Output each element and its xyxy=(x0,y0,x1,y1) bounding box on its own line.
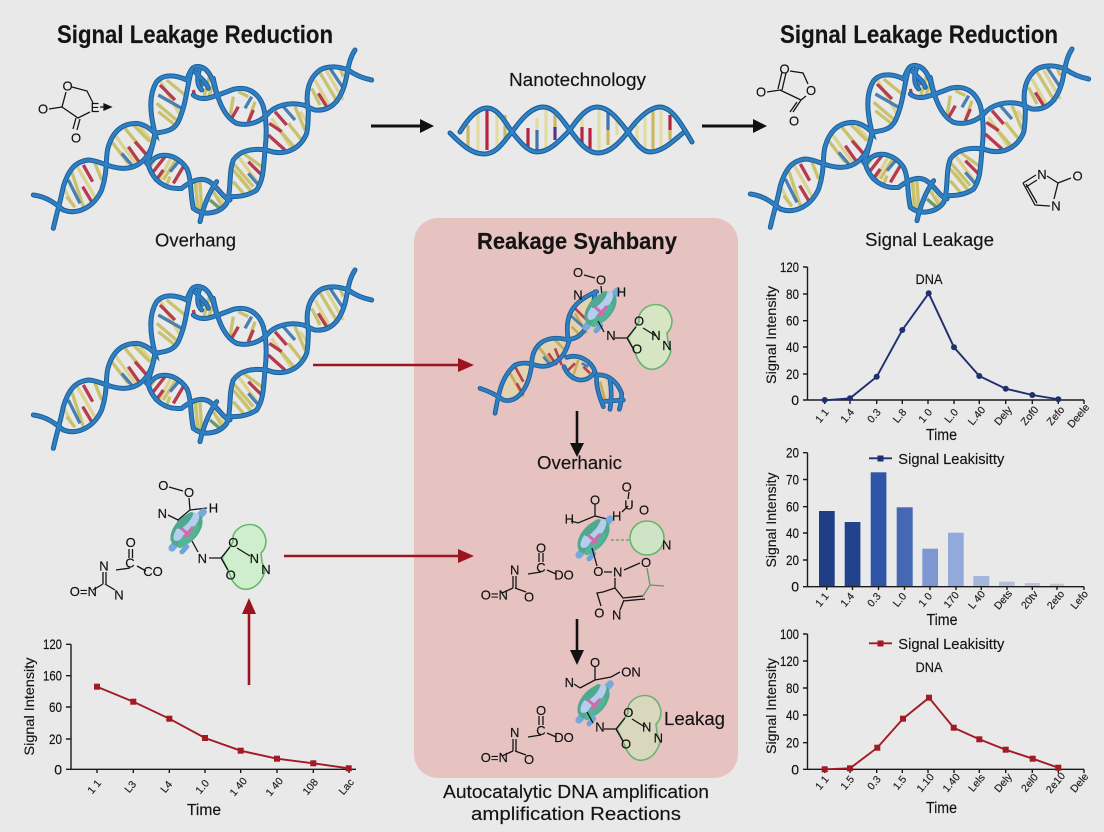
molecule: small left xyxy=(70,535,163,602)
y-axis ticks: 0 xyxy=(791,392,799,408)
caption: autocatalytic amplification: amplification Reactions xyxy=(471,804,681,824)
label: Signal Leakage: Signal Leakage xyxy=(865,230,994,250)
x-axis ticks: 1 40 xyxy=(228,775,250,799)
y-axis label: Signal Intensity xyxy=(763,658,779,754)
x-axis ticks: 1 1 xyxy=(85,778,104,797)
panel molecule 1: N xyxy=(662,338,672,353)
x-axis ticks xyxy=(813,770,1091,796)
panel DNA fragment xyxy=(480,292,623,413)
panel molecule 2: N xyxy=(612,608,621,622)
arrow: red to panel upper xyxy=(313,358,474,372)
y-axis ticks: 40 xyxy=(786,707,799,723)
molecule: top left xyxy=(38,78,111,146)
panel small molecule 2: C xyxy=(536,560,546,575)
panel molecule 3: O xyxy=(621,736,631,752)
x-axis ticks: 1 0 xyxy=(916,591,935,610)
panel label: Overhanic: Overhanic xyxy=(537,453,622,473)
x-axis ticks xyxy=(85,775,357,799)
x-axis ticks: 20tv xyxy=(1019,588,1041,612)
x-axis ticks: 1.40 xyxy=(941,771,963,795)
annotation DNA: DNA xyxy=(916,660,942,675)
molecule: imidazole right: N xyxy=(1037,167,1047,182)
panel molecule 3: N xyxy=(595,720,605,734)
panel molecule 1: N xyxy=(606,328,616,343)
panel molecule 2: N xyxy=(613,564,622,580)
panel molecule 2: O xyxy=(639,502,649,518)
DNA: top right xyxy=(750,49,1089,227)
annotation DNA: DNA xyxy=(916,272,942,287)
panel molecule 1: N xyxy=(573,288,583,302)
molecule: complex left: O xyxy=(228,535,238,550)
DNA: top left xyxy=(33,50,372,228)
arrow: red up xyxy=(242,598,256,685)
panel molecule 1: O xyxy=(596,272,606,288)
x-axis ticks: 0.3 xyxy=(865,591,884,610)
y-axis ticks: 20 xyxy=(786,445,799,461)
bars xyxy=(819,472,1064,587)
panel small molecule 2: O xyxy=(524,590,534,604)
x-axis label: Time xyxy=(187,802,221,819)
panel molecule 3: N xyxy=(565,675,574,690)
y-axis label: Signal Intensity xyxy=(763,286,779,384)
molecule: complex left: N xyxy=(158,506,167,521)
label: Nanotechnology: Nanotechnology xyxy=(509,70,646,90)
y-axis ticks: 100 xyxy=(780,626,799,642)
y-axis ticks: 20 xyxy=(49,731,62,747)
x-axis ticks: Zof0 xyxy=(1019,404,1041,428)
panel molecule 1: O xyxy=(573,265,583,280)
y-axis ticks: 20 xyxy=(786,735,799,751)
panel small molecule 2: DO xyxy=(554,568,574,582)
caption: autocatalytic amplification: Autocatalytic DNA amplification xyxy=(443,782,709,802)
y-axis ticks: 120 xyxy=(780,653,799,669)
panel molecule 3 xyxy=(565,655,663,760)
molecule: top left: E xyxy=(91,100,100,115)
x-axis label: Time xyxy=(926,612,958,629)
panel molecule 3: O xyxy=(623,705,633,720)
panel molecule 1 xyxy=(573,265,672,369)
x-axis ticks: 1.0 xyxy=(193,778,212,797)
x-axis ticks: 1.5 xyxy=(891,774,909,793)
molecule: complex left: O xyxy=(226,568,236,582)
molecule: top left: O xyxy=(62,78,73,94)
molecule: small left: C xyxy=(125,556,135,570)
panel molecule 2: O xyxy=(593,564,603,579)
panel small molecule 3: O xyxy=(524,752,534,767)
x-axis ticks: L.8 xyxy=(891,407,909,426)
x-axis ticks: Dets xyxy=(992,588,1015,612)
x-axis ticks: Deele xyxy=(1065,402,1092,430)
y-axis ticks: 120 xyxy=(780,259,799,275)
label: Overhang: Overhang xyxy=(155,230,236,250)
molecule: top right: O xyxy=(779,62,790,76)
x-axis ticks: 108 xyxy=(300,776,321,798)
y-axis ticks: 0 xyxy=(791,761,799,777)
molecule: imidazole right xyxy=(1023,167,1083,214)
molecule: complex left: O xyxy=(184,485,194,500)
y-axis ticks: 70 xyxy=(786,472,799,488)
title: left: Signal Leakage Reduction xyxy=(57,21,333,49)
line series xyxy=(97,687,349,768)
arrow: panel down 1 xyxy=(570,411,584,457)
x-axis ticks: 2eto xyxy=(1045,588,1067,612)
x-axis ticks: L.0 xyxy=(891,591,909,610)
panel molecule 1: H xyxy=(617,284,626,300)
panel small molecule 3: DO xyxy=(554,730,574,745)
panel molecule 2: O xyxy=(641,555,651,570)
x-axis ticks: L.40 xyxy=(966,404,988,428)
panel molecule 2 xyxy=(565,480,671,622)
molecule: small left: CO xyxy=(143,564,163,579)
x-axis ticks: 2el0 xyxy=(1019,771,1041,795)
x-axis ticks: 0.3 xyxy=(865,407,884,426)
panel molecule 3: ON xyxy=(621,664,641,680)
y-axis ticks: 60 xyxy=(786,499,799,515)
x-axis ticks: 1.10 xyxy=(915,771,937,795)
molecule: small left: N xyxy=(99,558,109,574)
molecule: complex left: N xyxy=(198,551,207,566)
panel small molecule 3: C xyxy=(536,723,546,738)
panel heading: Reakage Syahbany xyxy=(477,228,677,254)
molecule: top right xyxy=(756,62,816,128)
x-axis ticks: 170 xyxy=(941,589,962,611)
panel molecule 1: O xyxy=(634,314,644,328)
y-axis ticks: 80 xyxy=(786,680,799,696)
y-axis ticks: 40 xyxy=(786,339,799,355)
chart: top right line xyxy=(763,259,1092,444)
caption: autocatalytic amplification xyxy=(443,782,709,824)
x-axis ticks: 0.3 xyxy=(865,774,884,793)
molecule: complex left: N xyxy=(250,551,259,566)
y-axis ticks: 160 xyxy=(43,668,62,684)
y-axis ticks: 20 xyxy=(786,366,799,382)
molecule: complex left xyxy=(158,478,271,589)
arrow: red to panel lower xyxy=(284,549,474,563)
x-axis ticks: 1.5 xyxy=(838,774,857,793)
x-axis ticks: L4 xyxy=(158,779,175,795)
y-axis ticks xyxy=(780,259,799,408)
line series xyxy=(825,698,1058,769)
panel molecule 2: O xyxy=(594,606,604,620)
y-axis ticks: 60 xyxy=(786,313,799,329)
molecule: imidazole right: O xyxy=(1072,168,1083,184)
line series xyxy=(825,293,1058,400)
x-axis ticks: 1 1 xyxy=(813,774,832,793)
panel molecule 2: O xyxy=(590,492,600,508)
molecule: top left: O xyxy=(71,130,81,146)
y-axis ticks: 0 xyxy=(54,762,62,778)
panel molecule 3: N xyxy=(642,720,651,734)
arrow: top right black xyxy=(702,119,767,133)
panel small molecule 3: O xyxy=(536,703,546,718)
panel: reaction pathway xyxy=(414,218,738,778)
panel small molecule 2: N xyxy=(510,562,519,578)
x-axis ticks: Lefo xyxy=(1069,588,1091,612)
y-axis ticks: 0 xyxy=(791,579,799,595)
panel small molecule 2: O=N xyxy=(481,588,508,602)
y-axis ticks: 120 xyxy=(43,636,62,652)
panel molecule 1: N xyxy=(651,328,661,343)
panel molecule 2: N xyxy=(662,538,671,552)
x-axis ticks: 1 0 xyxy=(916,407,935,426)
x-axis ticks: L.0 xyxy=(942,407,961,426)
panel molecule 2: H xyxy=(565,512,574,526)
legend: Signal Leakisitty xyxy=(898,637,1005,653)
panel small molecule 2: O xyxy=(536,540,546,556)
x-axis label: Time xyxy=(926,800,957,817)
arrow: panel down 2 xyxy=(570,619,584,665)
x-axis ticks: Dely xyxy=(992,771,1015,795)
y-axis ticks: 40 xyxy=(786,525,799,541)
panel molecule 2: H xyxy=(612,508,621,524)
x-axis ticks: L 40 xyxy=(966,588,988,612)
DNA: middle left xyxy=(33,270,372,448)
molecule: top right: O xyxy=(806,83,816,98)
panel molecule 3: O xyxy=(590,655,600,670)
molecule: small left: O=N xyxy=(70,584,97,599)
x-axis ticks: 1.4 xyxy=(838,407,857,426)
panel small molecule 3 xyxy=(481,703,574,767)
molecule: top left: O xyxy=(38,102,48,116)
x-axis ticks: 1.4 xyxy=(838,591,857,610)
x-axis ticks xyxy=(813,588,1091,612)
y-axis ticks: 60 xyxy=(49,699,62,715)
x-axis ticks: Zefo xyxy=(1045,404,1067,428)
panel molecule 1: O xyxy=(632,342,642,356)
molecule: complex left: H xyxy=(209,500,218,516)
legend: Signal Leakisitty xyxy=(898,452,1005,468)
x-axis ticks: 1 40 xyxy=(264,775,286,799)
x-axis ticks xyxy=(813,402,1092,430)
x-axis ticks: Lac xyxy=(337,777,357,797)
panel label: Leakag: Leakag xyxy=(664,709,725,729)
panel molecule 2: O xyxy=(622,480,632,494)
arrow: top left black xyxy=(371,119,434,133)
chart: bottom right line xyxy=(763,626,1091,817)
chart: middle right bars xyxy=(763,445,1091,629)
DNA: nanotechnology centre xyxy=(450,107,692,154)
molecule: small left: N xyxy=(114,588,124,602)
panel molecule 3: N xyxy=(654,730,663,746)
molecule: complex left: O xyxy=(158,478,168,493)
y-axis label: Signal Intensity xyxy=(21,658,37,755)
x-axis ticks: L3 xyxy=(122,779,139,795)
chart: left line signal intensity decay xyxy=(21,636,357,819)
x-axis ticks: 1 1 xyxy=(813,407,832,426)
y-axis ticks: 80 xyxy=(786,286,799,302)
y-axis ticks: 20 xyxy=(786,552,799,568)
molecule: imidazole right: N xyxy=(1051,198,1061,214)
molecule: complex left: N xyxy=(261,562,271,577)
y-axis ticks xyxy=(780,626,799,777)
panel small molecule 3: N xyxy=(510,725,519,740)
panel small molecule 3: O=N xyxy=(481,750,508,765)
y-axis ticks xyxy=(43,636,62,778)
y-axis ticks xyxy=(786,445,799,595)
x-axis ticks: Dele xyxy=(1068,771,1091,795)
title: right: Signal Leakage Reduction xyxy=(780,21,1058,49)
x-axis ticks: Dely xyxy=(992,404,1015,428)
panel small molecule 2 xyxy=(481,540,574,604)
x-axis ticks: Lels xyxy=(966,772,988,794)
molecule: small left: O xyxy=(126,535,136,550)
x-axis label: Time xyxy=(926,427,957,444)
panel molecule 2: U xyxy=(624,498,634,512)
y-axis label: Signal Intensity xyxy=(763,472,779,568)
molecule: top right: O xyxy=(756,84,766,100)
x-axis ticks: 2e10 xyxy=(1044,770,1068,796)
molecule: top right: O xyxy=(789,114,799,128)
x-axis ticks: 1 1 xyxy=(813,591,832,610)
